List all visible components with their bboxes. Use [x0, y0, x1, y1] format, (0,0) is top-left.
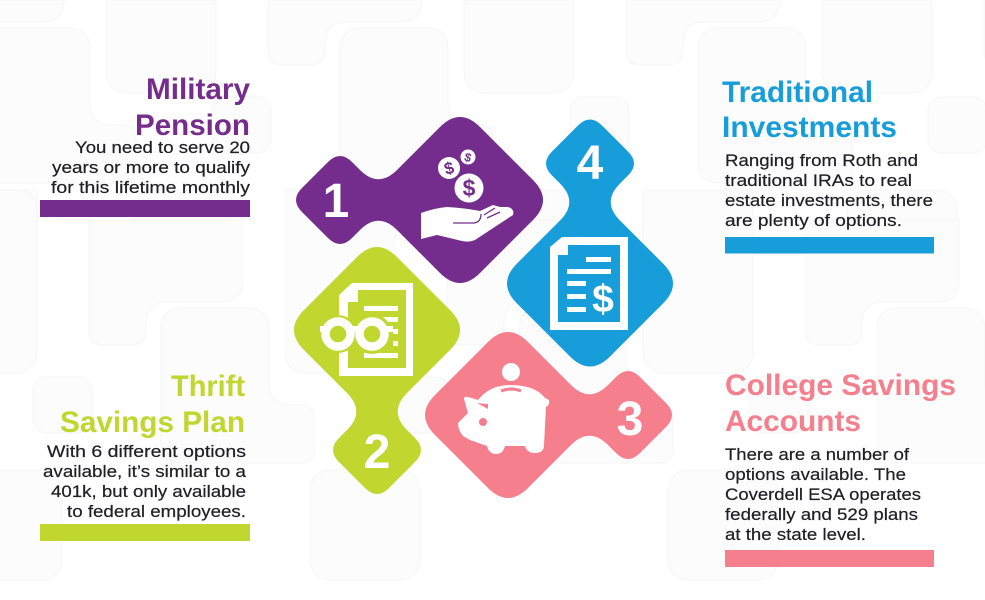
icon: document with dollar: [550, 237, 628, 330]
heading: thrift savings plan: [60, 370, 245, 439]
heading: traditional investments: [722, 76, 897, 144]
panel: thrift savings plan: [40, 370, 250, 541]
text block: traditional investments: traditional IRAs to real: [725, 172, 912, 190]
text block: military pension: for this lifetime monthly: [51, 179, 251, 197]
text block: military pension: years or more to qualify: [52, 159, 251, 177]
panel: military pension: [40, 73, 251, 217]
heading: military pension: Military: [146, 73, 250, 106]
heading: thrift savings plan: Savings Plan: [60, 406, 245, 439]
text block: thrift savings plan: With 6 different options: [47, 443, 246, 461]
accent bar: blue: [725, 237, 934, 254]
text block: college savings accounts: [725, 446, 921, 544]
icon: hand with coins: [421, 150, 513, 242]
text block: college savings accounts: at the state level.: [725, 526, 866, 544]
shape: step 3 pink: [425, 332, 672, 498]
number 1: 1: [323, 175, 349, 228]
icon: hand with coins: $: [463, 150, 473, 165]
icon: piggy bank: [458, 363, 549, 454]
text block: military pension: You need to serve 20: [75, 139, 250, 157]
heading: military pension: [135, 73, 250, 142]
icon: hand with coins: $: [463, 175, 476, 201]
text block: thrift savings plan: [43, 443, 247, 521]
accent bar: purple: [40, 200, 250, 217]
panel: college savings accounts: [725, 369, 956, 567]
text block: traditional investments: Ranging from Roth and: [725, 152, 918, 170]
heading: thrift savings plan: Thrift: [171, 370, 245, 403]
text block: college savings accounts: There are a number of: [725, 446, 909, 464]
number 2: 2: [364, 426, 390, 479]
number 3: 3: [617, 393, 643, 446]
number 4: 4: [577, 137, 604, 190]
heading: traditional investments: Traditional: [722, 76, 873, 109]
heading: college savings accounts: College Savings: [725, 369, 956, 402]
panel: traditional investments: [722, 76, 934, 254]
text block: traditional investments: estate investments, there: [725, 192, 933, 210]
heading: college savings accounts: [725, 369, 956, 438]
heading: traditional investments: Investments: [722, 111, 897, 144]
icon: document with glasses: [319, 283, 413, 376]
accent bar: green: [40, 524, 250, 541]
heading: military pension: Pension: [135, 109, 250, 142]
icon: document with dollar: $: [592, 278, 614, 321]
shape: step 1 purple: [296, 117, 543, 283]
shape: step 2 green: [294, 247, 460, 494]
text block: college savings accounts: options available. The: [725, 466, 906, 484]
text block: traditional investments: [725, 152, 933, 230]
heading: college savings accounts: Accounts: [725, 405, 861, 438]
icon: hand with coins: $: [442, 158, 457, 179]
text block: thrift savings plan: to federal employees.: [67, 503, 246, 521]
text block: traditional investments: are plenty of options.: [725, 212, 902, 230]
text block: military pension: [51, 139, 251, 197]
text block: college savings accounts: federally and 529 plans: [725, 506, 918, 524]
text block: thrift savings plan: 401k, but only available: [51, 483, 246, 501]
accent bar: pink: [725, 550, 934, 567]
shape: step 4 blue: [507, 120, 673, 366]
text block: thrift savings plan: available, it’s similar to a: [43, 463, 247, 481]
text block: college savings accounts: Coverdell ESA operates: [725, 486, 921, 504]
